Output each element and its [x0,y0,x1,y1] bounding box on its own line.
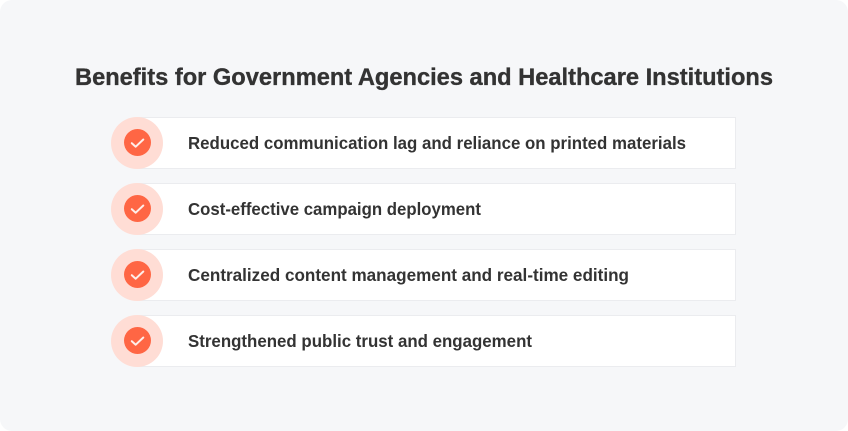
row 3 text: Centralized content management and real-time editing [188,265,629,285]
row 4 text: Strengthened public trust and engagement [188,331,532,351]
icon: check badge 3 [111,249,163,301]
title: Benefits for Government Agencies and Healthcare Institutions [75,64,773,91]
row 3 card [138,250,736,300]
benefit row 4 [111,315,736,367]
icon: check badge 1 [111,117,163,169]
benefit row 1 [111,117,736,169]
benefit row 2 [111,183,736,235]
row 1 text: Reduced communication lag and reliance on printed materials [188,133,686,153]
benefit row 3 [111,249,736,301]
row 2 text: Cost-effective campaign deployment [188,199,481,219]
row 2 card [138,184,736,234]
row 1 card [138,118,736,168]
icon: check badge 2 [111,183,163,235]
icon: check badge 4 [111,315,163,367]
row 4 card [138,316,736,366]
